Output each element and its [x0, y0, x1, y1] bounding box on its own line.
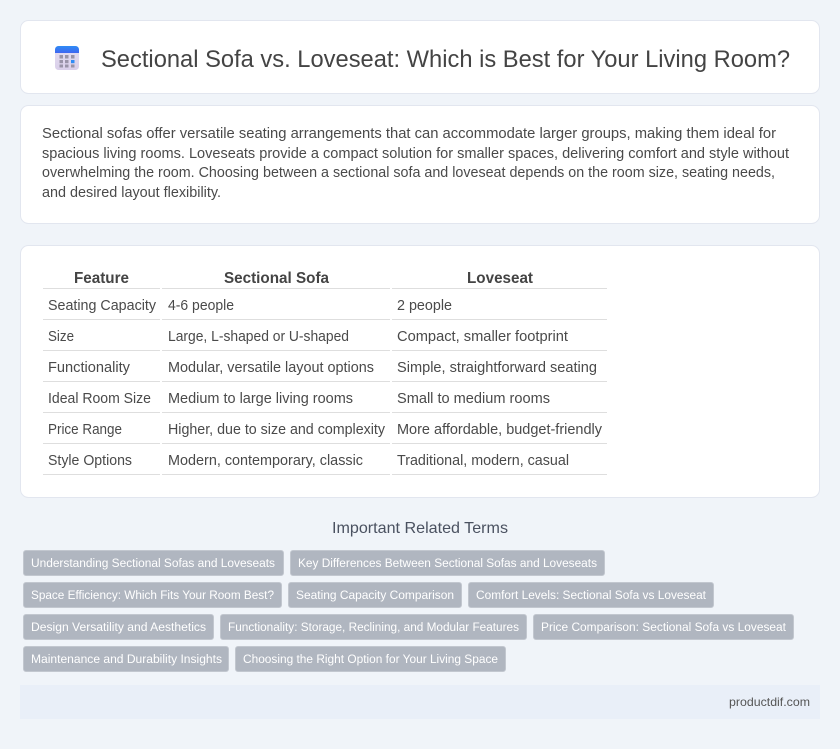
row: ideal room size: Ideal Room Size [48, 391, 151, 407]
panel: summary [20, 106, 820, 224]
text block: summary paragraph: and desired layout flexibility. [42, 185, 221, 201]
row: size: Size [48, 329, 74, 345]
row: style options: Traditional, modern, casual [397, 453, 569, 469]
row: style options: Style Options [48, 453, 132, 469]
icon: calendar [55, 46, 79, 70]
tag [24, 646, 228, 672]
tag [24, 582, 282, 608]
tag [290, 550, 604, 576]
row: functionality: Functionality [48, 360, 131, 376]
row: size: Compact, smaller footprint [397, 329, 568, 345]
row: functionality: Simple, straightforward seating [397, 360, 597, 376]
row: seating capacity: 2 people [397, 298, 452, 314]
row: ideal room size [48, 391, 550, 407]
related term tags [24, 550, 794, 672]
row: price range: Higher, due to size and complexity [168, 422, 386, 438]
row: seating capacity [48, 298, 452, 314]
tag: Understanding Sectional Sofas and Loveseats [31, 556, 275, 570]
row: style options: Modern, contemporary, classic [168, 453, 363, 469]
row: price range [48, 422, 603, 438]
row: size [48, 329, 568, 345]
tag [220, 614, 526, 640]
tag [288, 582, 462, 608]
table header: Sectional Sofa [224, 270, 329, 287]
table header: Loveseat [467, 270, 533, 287]
tag [24, 614, 214, 640]
row: style options [48, 453, 569, 469]
row: price range: More affordable, budget-friendly [397, 422, 603, 438]
row: price range: Price Range [48, 422, 122, 438]
footer source text: productdif.com [729, 695, 810, 709]
tag: Design Versatility and Aesthetics [31, 620, 206, 634]
tag [534, 614, 794, 640]
tag: Space Efficiency: Which Fits Your Room Best? [31, 588, 274, 602]
tag [236, 646, 506, 672]
tag [468, 582, 714, 608]
tag: Choosing the Right Option for Your Living Space [243, 652, 498, 666]
panel: comparison table [20, 246, 820, 498]
text block: summary paragraph: Sectional sofas offer versatile seating arrangements that can accommodate larger groups, making them ideal for [42, 126, 776, 142]
row: seating capacity: Seating Capacity [48, 298, 157, 314]
table header: Feature [74, 270, 129, 287]
tag: Price Comparison: Sectional Sofa vs Loveseat [541, 620, 787, 634]
text block: summary paragraph: overwhelming the room. Choosing between a sectional sofa and loveseat depends on the room size, seating needs, [42, 165, 775, 181]
panel: header [20, 20, 820, 94]
tag: Key Differences Between Sectional Sofas and Loveseats [298, 556, 597, 570]
footer [20, 685, 820, 719]
text block: summary paragraph [42, 126, 789, 201]
text block: summary paragraph: spacious living rooms. Loveseats provide a compact solution for smaller spaces, delivering comfort and style without [42, 146, 789, 162]
row: ideal room size: Medium to large living rooms [168, 391, 353, 407]
tag: Comfort Levels: Sectional Sofa vs Loveseat [476, 588, 707, 602]
tag: Maintenance and Durability Insights [31, 652, 222, 666]
title: Sectional Sofa vs. Loveseat: Which is Best for Your Living Room? [101, 46, 790, 73]
row: functionality [48, 360, 597, 376]
table rules [43, 288, 607, 474]
tag: Seating Capacity Comparison [296, 588, 454, 602]
row: functionality: Modular, versatile layout options [168, 360, 374, 376]
tag: Functionality: Storage, Reclining, and Modular Features [228, 620, 519, 634]
tag [24, 550, 284, 576]
row: seating capacity: 4-6 people [168, 298, 234, 314]
table header [74, 270, 533, 287]
row: size: Large, L-shaped or U-shaped [168, 329, 349, 345]
row: ideal room size: Small to medium rooms [397, 391, 550, 407]
heading: related terms: Important Related Terms [332, 520, 508, 537]
